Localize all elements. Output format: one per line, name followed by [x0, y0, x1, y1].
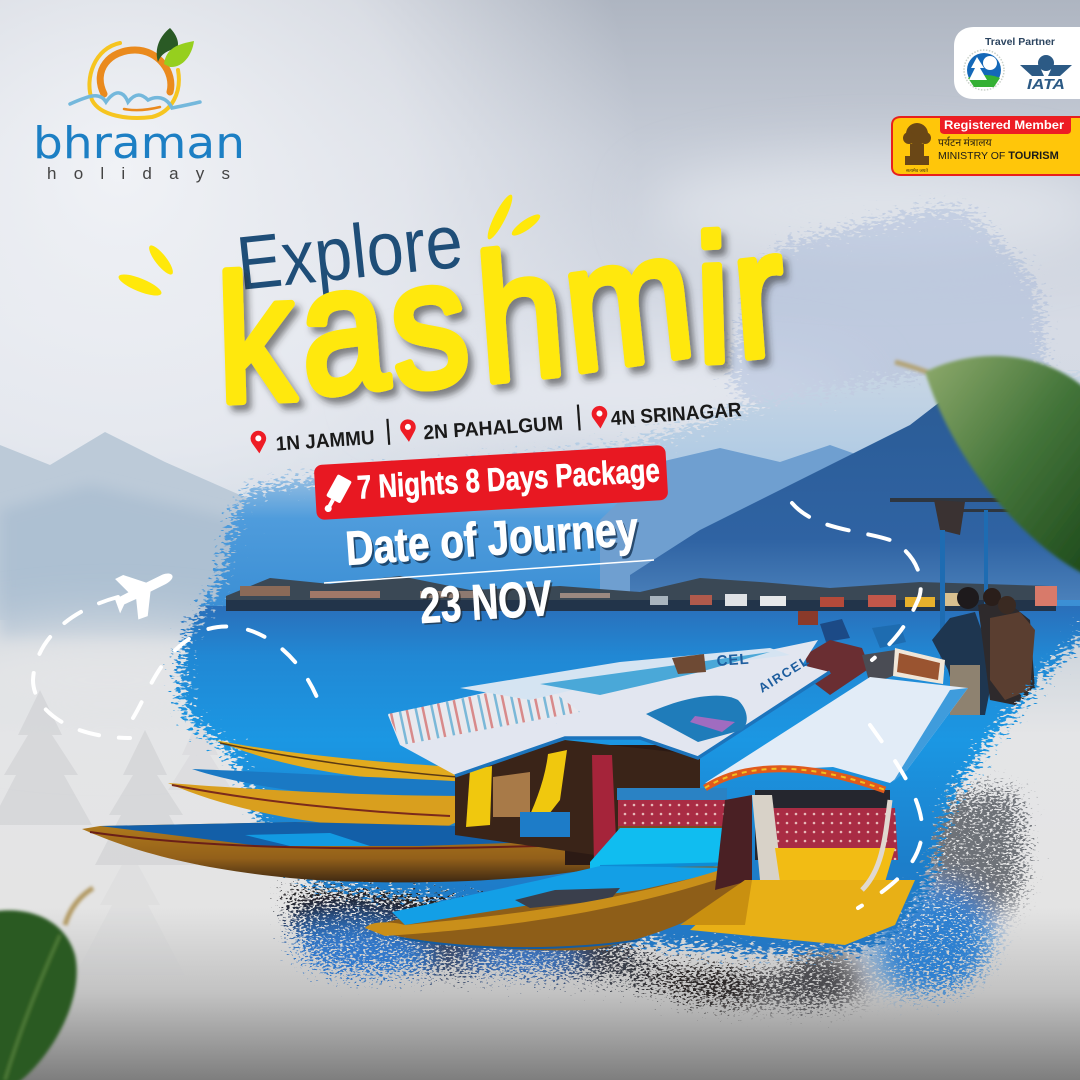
itinerary line: [250, 393, 743, 457]
package ribbon: 7 Nights 8 Days Package: [356, 451, 661, 506]
pine tree silhouettes: [0, 690, 232, 975]
date of journey: Date of Journey: [346, 506, 642, 579]
main shikara hull: [365, 862, 745, 950]
small background craft and signs: [798, 611, 945, 695]
brushed sky patch upper right: [714, 193, 1060, 411]
jetty: [890, 498, 1038, 670]
title: kashmir: kashmir: [215, 192, 791, 441]
icon: national emblem: [903, 123, 931, 165]
canopy boat centre: CEL: [716, 651, 749, 670]
title: Explore: Explore: [233, 199, 467, 307]
lake: [160, 606, 1080, 970]
canopy boat centre: [388, 640, 830, 885]
icon: IATA: IATA: [1027, 76, 1065, 93]
rear shikara boats: [168, 740, 475, 830]
logo: bhraman holidays: holidays: [47, 164, 230, 183]
icon: plane: [108, 559, 183, 625]
itinerary line: 4N SRINAGAR: [610, 399, 743, 430]
canopy boat centre: AIRCEL: [756, 653, 811, 696]
ministry of tourism badge: Registered Member: [944, 118, 1064, 132]
yellow accent strokes: [116, 192, 543, 300]
leaf: right: [895, 356, 1080, 578]
itinerary line: 2N PAHALGUM: [423, 413, 564, 444]
icon: location pin: [400, 419, 417, 442]
canopy: [388, 640, 830, 775]
photo scene: Dal Lake: [150, 370, 1080, 1026]
icon: tourism emblem: [964, 50, 1004, 90]
divider line: [324, 560, 654, 583]
date of journey: Date of Journey: [344, 503, 640, 576]
icon: location pin: [591, 405, 608, 429]
right canopy boat: [680, 677, 968, 945]
shoreline houseboats and jetty, people: [82, 498, 1057, 950]
ministry of tourism badge: सत्यमेव जयते: [906, 167, 928, 173]
distant mountains: [600, 445, 854, 592]
brushed speckle around lower scene: [270, 770, 1049, 1030]
travel partner badge: Travel Partner: [985, 36, 1055, 48]
dashed flight path: [33, 503, 922, 908]
wordmark: bhraman: [33, 118, 245, 169]
date: 23 NOV: 23 NOV: [418, 570, 554, 634]
icon: suitcase: [319, 474, 352, 515]
ministry of tourism badge: MINISTRY OF TOURISM: [938, 150, 1059, 162]
ministry of tourism badge: [892, 117, 1080, 175]
logo: bhraman holidays: [33, 28, 245, 183]
main mountain: [630, 398, 1080, 600]
date: 23 NOV: 23 NOV: [420, 572, 556, 636]
long front shikara: [82, 815, 600, 882]
people: [932, 587, 1035, 715]
package ribbon: [314, 445, 668, 520]
logo mark: [70, 43, 200, 118]
icon: location pin: [250, 430, 267, 454]
itinerary line: 1N JAMMU: [275, 427, 375, 456]
ministry of tourism badge: पर्यटन मंत्रालय: [938, 135, 992, 150]
leaf: bottom left: [0, 888, 93, 1080]
travel partner badge: [954, 27, 1080, 99]
sky: [150, 370, 1080, 610]
